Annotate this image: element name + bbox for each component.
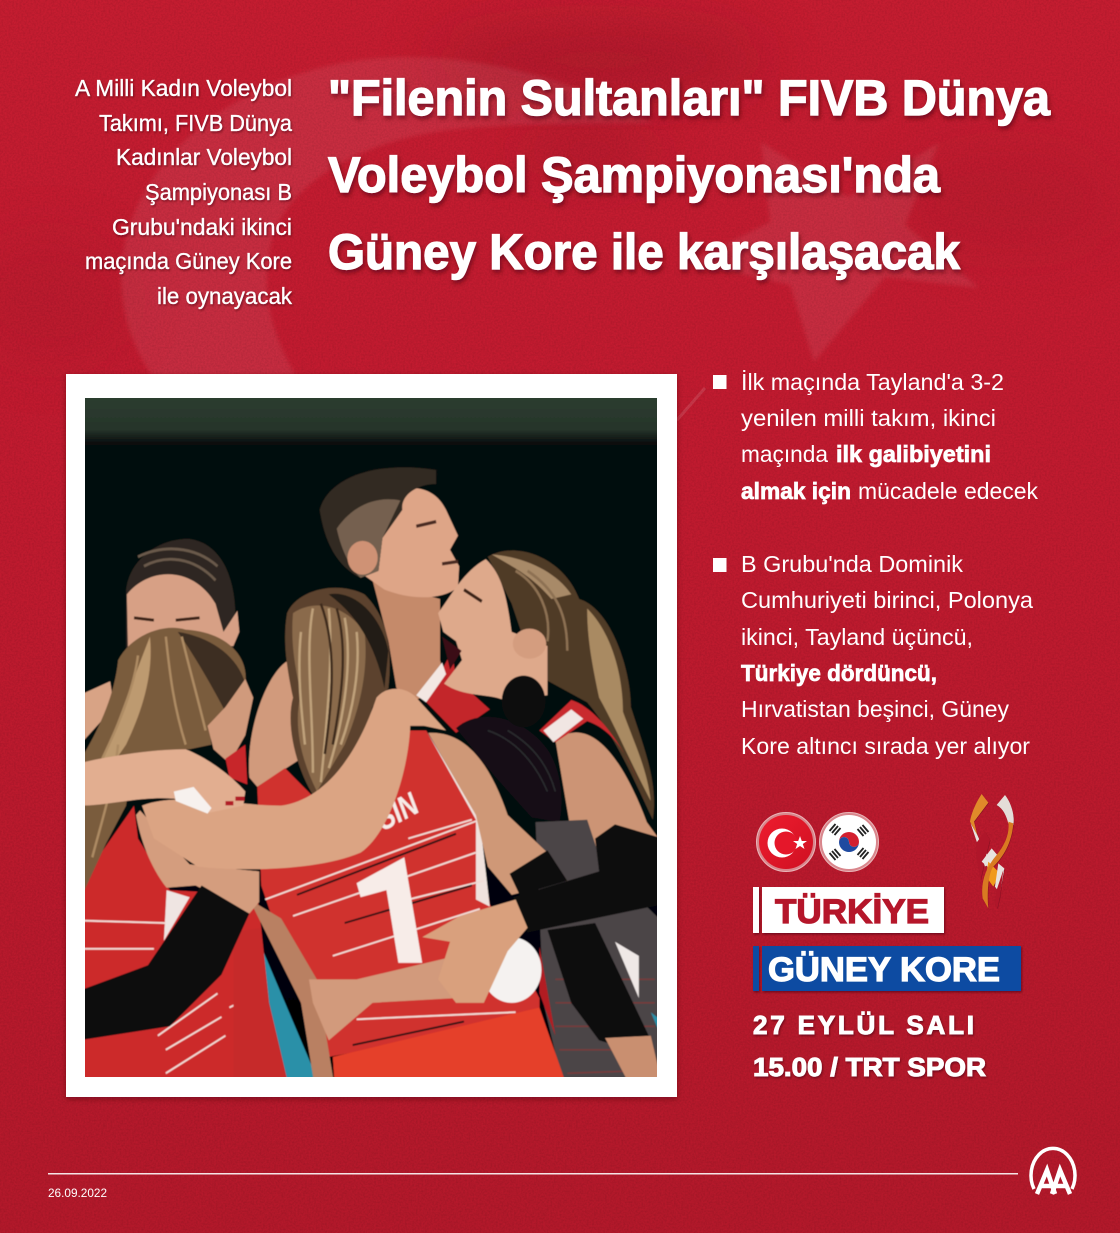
title: "Filenin Sultanları" FIVB Dünya [328,70,1051,126]
grey jersey [536,820,659,1087]
bullet 1: yenilen milli takım, ikinci [741,405,996,431]
label: GÜNEY KORE: GÜNEY KORE [768,951,1000,989]
bullet 1: almak için [741,478,851,504]
blue floor [263,952,314,1077]
black hair woman [456,717,562,822]
screaming woman [488,551,654,820]
center ponytail [285,588,390,801]
back left woman [126,539,235,651]
intro text block: maçında Güney Kore [85,248,292,274]
bullet 2: Hırvatistan beşinci, Güney [741,696,1009,722]
bullet 2: B Grubu'nda Dominik [741,551,964,577]
icon: South Korean flag [820,812,878,872]
center woman's shoulder [428,733,567,895]
bullet 1 [713,369,1038,504]
title: Voleybol Şampiyonası'nda [328,147,941,203]
intro text block [75,75,292,309]
big arm [142,689,446,869]
icon: Turkish flag [756,812,816,872]
title [328,70,1051,280]
match date: 27 EYLÜL SALI [753,1010,974,1040]
bullet 2: ikinci, Tayland üçüncü, [741,624,973,650]
bullet 2 [713,551,1033,759]
intro text block: ile oynayacak [157,283,292,309]
title: Güney Kore ile karşılaşacak [328,224,960,280]
center woman jersey [249,660,301,787]
icon: AA logo [1031,1148,1075,1194]
date: 26.09.2022 [48,1186,107,1200]
bullet 1: mücadele edecek [858,478,1038,504]
match time and channel: 15.00 / TRT SPOR [753,1052,986,1082]
icon: championship ribbon logo [970,794,1014,908]
elbow and right sleeves [510,850,567,895]
photo: players celebrating [78,395,663,1090]
intro text block: Kadınlar Voleybol [116,144,292,170]
bullet 1: ilk galibiyetini [836,441,991,467]
hand arm [78,749,245,813]
intro text block: Grubu'ndaki ikinci [112,214,292,240]
bullet 1: maçında [741,441,828,467]
label: TÜRKİYE [753,887,944,933]
footer rule [48,1173,1018,1174]
panel: photo frame [66,374,677,1097]
left hair [78,628,246,895]
sleeves [78,885,249,1040]
bullet 2: Cumhuriyeti birinci, Polonya [741,587,1033,613]
bullet 2: Türkiye dördüncü, [741,660,937,686]
left woman's back [136,810,259,914]
bullet 1: İlk maçında Tayland'a 3-2 [741,369,1004,395]
jersey name: SIN [372,785,423,839]
intro text block: Takımı, FIVB Dünya [99,110,292,136]
intro text block: Şampiyonası B [145,179,292,205]
intro text block: A Milli Kadın Voleybol [75,75,292,101]
label: TÜRKİYE: TÜRKİYE [775,893,929,931]
short hair woman [373,580,446,700]
left jersey [78,806,261,1087]
bullet 2: Kore altıncı sırada yer alıyor [741,733,1030,759]
arm around waist [309,956,456,1040]
